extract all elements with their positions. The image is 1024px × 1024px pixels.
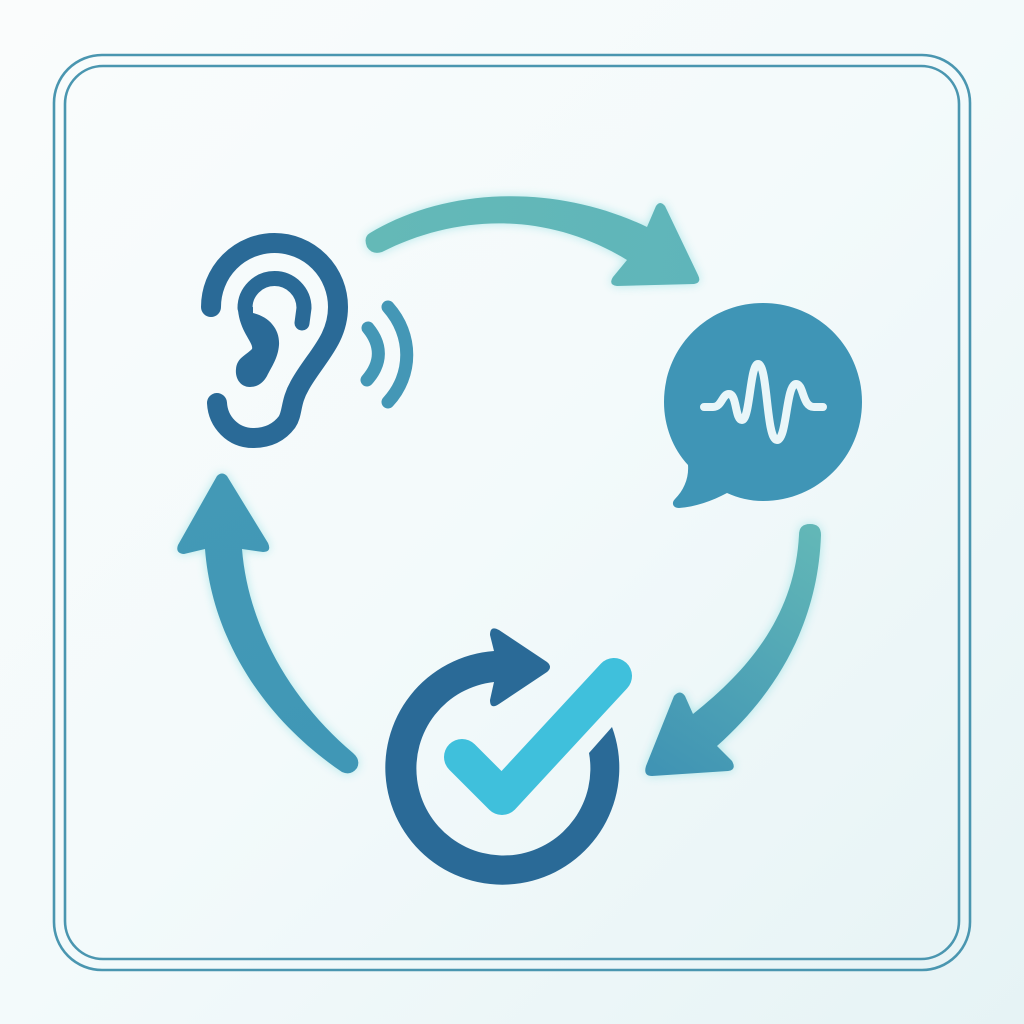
circular arrow head (490, 628, 550, 706)
icon: circular arrow with check mark (385, 628, 619, 885)
sound wave large (388, 307, 407, 402)
circular arrow ring (385, 651, 619, 885)
inner ear lobe (236, 307, 279, 387)
inner ear fold (245, 278, 304, 323)
outer double frame (54, 55, 970, 970)
waveform (704, 364, 823, 440)
arrow: top, ear to speech (366, 196, 699, 286)
ear outline (211, 243, 338, 438)
arrow: left, check to ear (177, 474, 358, 773)
icon: speech bubble with waveform (664, 303, 862, 508)
check mark (462, 676, 614, 797)
icon: ear with sound waves (211, 243, 407, 438)
sound wave small (367, 328, 378, 380)
arrow: right, speech to check (645, 524, 821, 776)
